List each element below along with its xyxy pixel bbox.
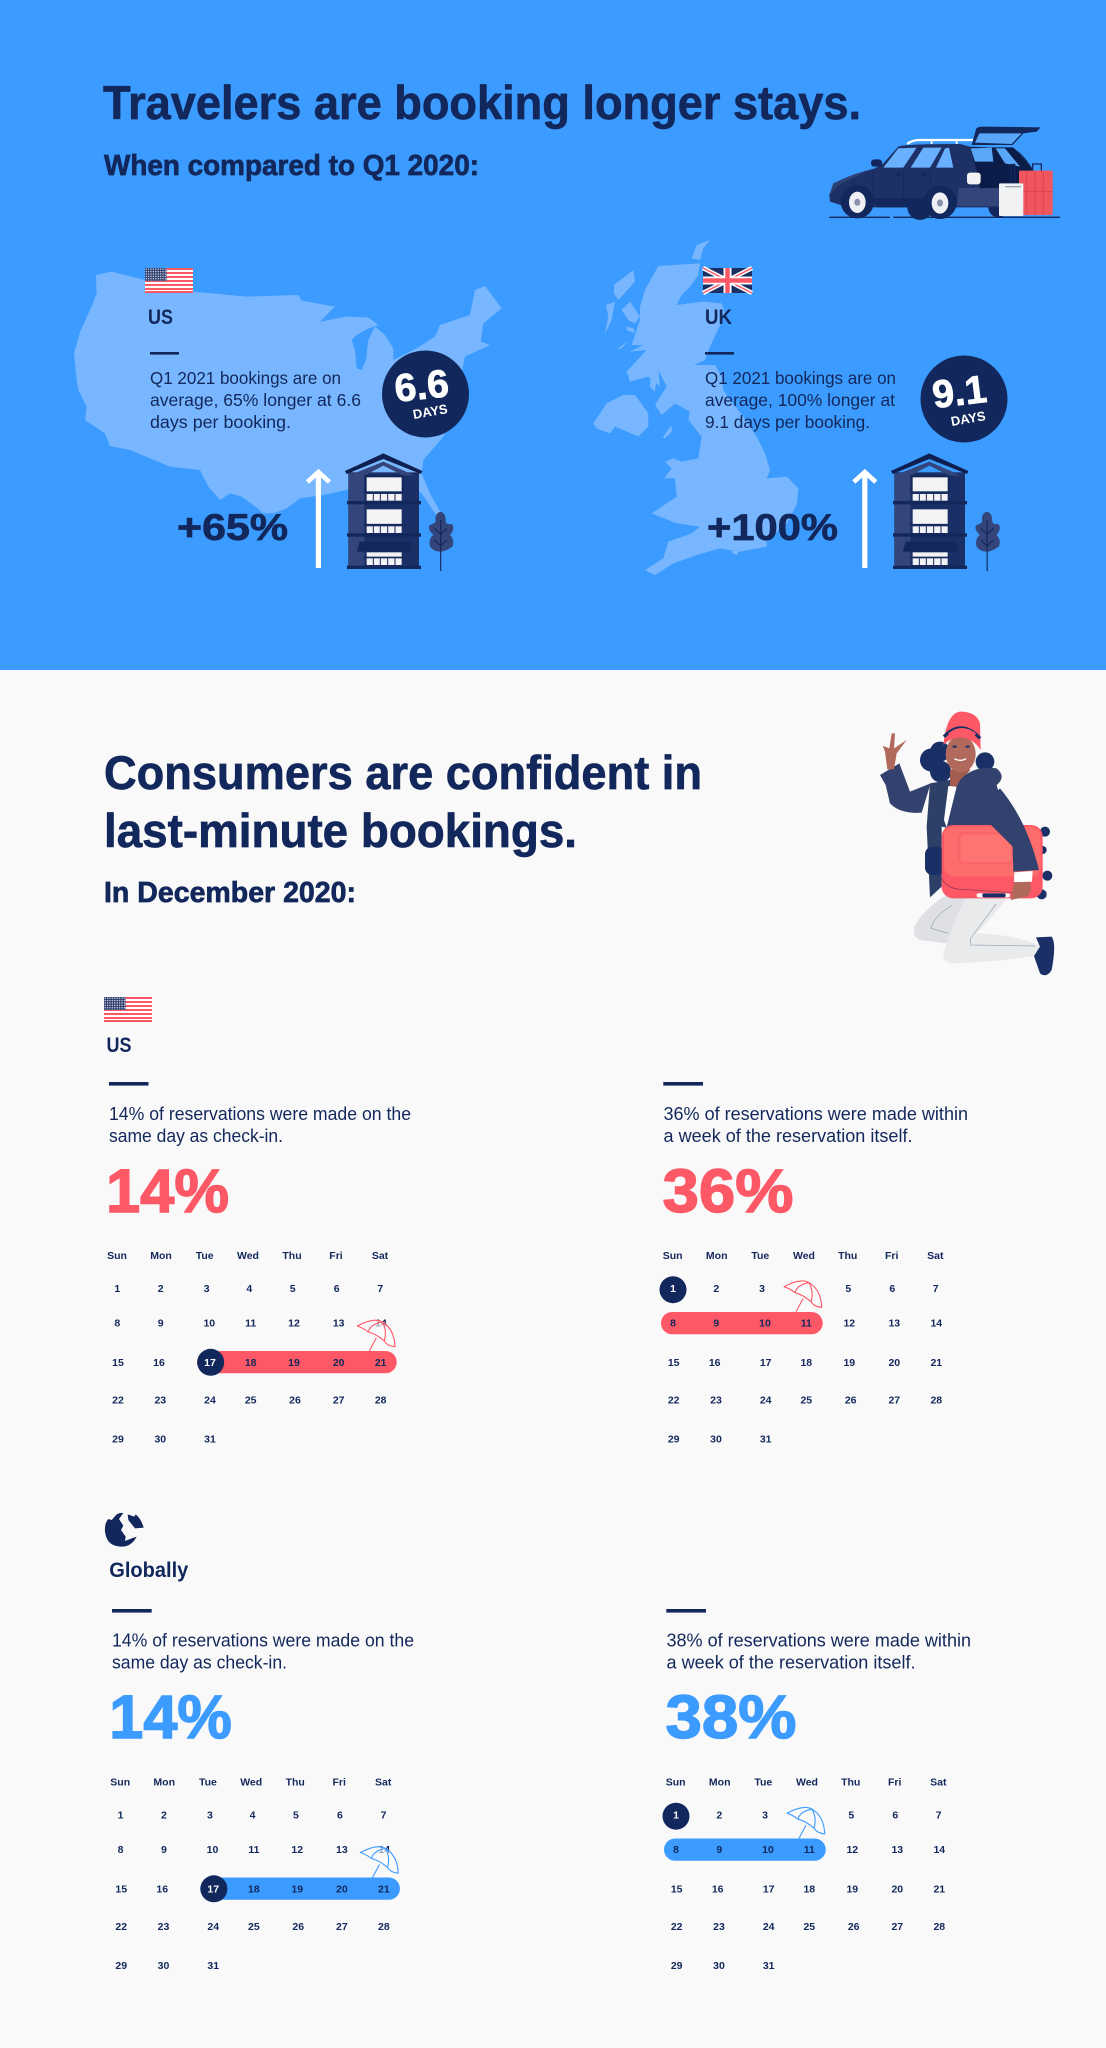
calendar: 30 bbox=[710, 1434, 722, 1446]
calendar: 10 bbox=[203, 1318, 215, 1330]
calendar: 17 bbox=[204, 1357, 216, 1369]
calendar: 8 bbox=[114, 1318, 120, 1330]
calendar: Tue bbox=[199, 1776, 217, 1788]
calendar: 8 bbox=[673, 1844, 679, 1856]
calendar: 11 bbox=[804, 1844, 815, 1856]
calendar: 27 bbox=[333, 1394, 345, 1406]
calendar: 18 bbox=[248, 1884, 260, 1896]
calendar: 31 bbox=[204, 1434, 216, 1446]
icon: tree bbox=[975, 512, 1000, 571]
calendar: 15 bbox=[668, 1357, 680, 1369]
calendar: Mon bbox=[153, 1776, 175, 1788]
calendar: 13 bbox=[891, 1844, 903, 1856]
calendar: 16 bbox=[156, 1884, 168, 1896]
icon: umbrella bbox=[360, 1847, 398, 1878]
calendar: Thu bbox=[286, 1776, 305, 1788]
panel: global within-a-week calendar bbox=[662, 1609, 971, 1972]
calendar: 30 bbox=[713, 1960, 725, 1972]
stat: 14%: 14% bbox=[109, 1683, 232, 1751]
description: same day as check-in. bbox=[109, 1126, 283, 1146]
icon: building bbox=[345, 453, 422, 569]
icon: umbrella bbox=[787, 1807, 825, 1838]
calendar: 1 bbox=[670, 1283, 676, 1295]
calendar: 22 bbox=[671, 1921, 683, 1933]
calendar: 23 bbox=[154, 1394, 166, 1406]
badge: 6.6 days: DAYS bbox=[412, 401, 449, 422]
panel: UK stay bbox=[703, 268, 1008, 571]
badge: 9.1 days: 9.1 bbox=[930, 368, 989, 417]
calendar bbox=[107, 1250, 397, 1446]
calendar bbox=[660, 1250, 944, 1446]
badge: 6.6 days: 6.6 bbox=[392, 362, 451, 411]
description: US: Q1 2021 bookings are on bbox=[150, 368, 341, 388]
calendar: 1 bbox=[114, 1283, 120, 1295]
calendar: 7 bbox=[381, 1810, 387, 1822]
label: US: US bbox=[148, 306, 173, 329]
calendar: 20 bbox=[333, 1357, 345, 1369]
calendar: 22 bbox=[668, 1394, 680, 1406]
calendar: 26 bbox=[292, 1921, 304, 1933]
calendar: 28 bbox=[375, 1394, 387, 1406]
icon: US flag bbox=[104, 997, 152, 1022]
description: same day as check-in. bbox=[112, 1653, 287, 1673]
map: United Kingdom bbox=[593, 240, 798, 575]
calendar: 20 bbox=[891, 1884, 903, 1896]
panel: US same-day calendar bbox=[104, 997, 411, 1446]
calendar: 24 bbox=[760, 1394, 772, 1406]
calendar: 2 bbox=[713, 1283, 719, 1295]
description: 36% of reservations were made within bbox=[664, 1104, 968, 1124]
calendar: 6 bbox=[892, 1810, 898, 1822]
calendar: 18 bbox=[800, 1357, 812, 1369]
calendar: 26 bbox=[848, 1921, 860, 1933]
panel: travelers blue section bbox=[0, 0, 1106, 670]
calendar: 16 bbox=[709, 1357, 721, 1369]
title: Travelers are booking longer stays. bbox=[103, 76, 861, 129]
calendar: 8 bbox=[670, 1318, 676, 1330]
calendar: Fri bbox=[332, 1776, 346, 1788]
illustration: car with suitcases bbox=[829, 127, 1060, 220]
calendar: 25 bbox=[800, 1394, 812, 1406]
calendar bbox=[110, 1776, 400, 1972]
panel: US stay bbox=[145, 268, 469, 571]
calendar: 23 bbox=[710, 1394, 722, 1406]
label: Globally: Globally bbox=[109, 1559, 189, 1582]
stat: 14%: 14% bbox=[106, 1157, 229, 1225]
calendar: Fri bbox=[888, 1776, 901, 1788]
calendar: 23 bbox=[158, 1921, 169, 1933]
calendar: 9 bbox=[716, 1844, 722, 1856]
calendar: 17 bbox=[207, 1884, 219, 1896]
calendar: Sat bbox=[372, 1250, 389, 1262]
icon: building bbox=[891, 453, 968, 569]
description: 38% of reservations were made within bbox=[666, 1631, 971, 1651]
calendar: 31 bbox=[763, 1960, 775, 1972]
calendar: 21 bbox=[933, 1884, 945, 1896]
calendar: 13 bbox=[333, 1318, 345, 1330]
calendar: Thu bbox=[841, 1776, 860, 1788]
calendar: 22 bbox=[112, 1394, 124, 1406]
calendar: 18 bbox=[245, 1357, 257, 1369]
calendar: 11 bbox=[245, 1318, 256, 1330]
calendar: Mon bbox=[709, 1776, 730, 1788]
icon: UK flag bbox=[703, 268, 752, 293]
badge: 9.1 days bbox=[920, 356, 1008, 442]
calendar: 6 bbox=[334, 1283, 340, 1295]
calendar: 7 bbox=[377, 1283, 383, 1295]
calendar: 27 bbox=[891, 1921, 903, 1933]
calendar: 26 bbox=[845, 1394, 857, 1406]
calendar: Fri bbox=[885, 1250, 898, 1262]
description: 14% of reservations were made on the bbox=[112, 1631, 414, 1651]
calendar: 19 bbox=[846, 1884, 858, 1896]
calendar: Tue bbox=[754, 1776, 772, 1788]
calendar: 20 bbox=[888, 1357, 900, 1369]
calendar bbox=[662, 1776, 947, 1972]
description: US bbox=[150, 352, 361, 432]
heading bbox=[104, 746, 702, 857]
stat: +65%: +65% bbox=[177, 507, 288, 548]
calendar: 20 bbox=[336, 1884, 348, 1896]
calendar: 14 bbox=[930, 1318, 942, 1330]
subheading: In December 2020: bbox=[104, 877, 356, 909]
description: UK: average, 100% longer at bbox=[705, 390, 895, 410]
description: a week of the reservation itself. bbox=[664, 1126, 912, 1146]
calendar: 14 bbox=[933, 1844, 945, 1856]
calendar: 21 bbox=[375, 1357, 387, 1369]
calendar: 17 bbox=[763, 1884, 775, 1896]
calendar: 22 bbox=[115, 1921, 127, 1933]
calendar: 25 bbox=[803, 1921, 815, 1933]
heading: Consumers are confident in bbox=[104, 746, 702, 799]
calendar: 21 bbox=[378, 1884, 390, 1896]
calendar: 7 bbox=[936, 1810, 942, 1822]
icon: umbrella bbox=[357, 1320, 395, 1351]
calendar: Mon bbox=[150, 1250, 172, 1262]
calendar: 31 bbox=[207, 1960, 219, 1972]
description: US: average, 65% longer at 6.6 bbox=[150, 390, 361, 410]
calendar: 29 bbox=[671, 1960, 683, 1972]
calendar: Wed bbox=[237, 1250, 259, 1262]
description: a week of the reservation itself. bbox=[666, 1653, 916, 1673]
calendar: 9 bbox=[713, 1318, 719, 1330]
calendar: 4 bbox=[246, 1283, 252, 1295]
description bbox=[112, 1609, 414, 1673]
calendar: 24 bbox=[763, 1921, 775, 1933]
icon: tree bbox=[429, 512, 453, 571]
calendar: 29 bbox=[115, 1960, 127, 1972]
calendar: 11 bbox=[801, 1318, 812, 1330]
calendar: 19 bbox=[843, 1357, 855, 1369]
calendar: 29 bbox=[668, 1434, 680, 1446]
calendar: 6 bbox=[889, 1283, 895, 1295]
description: UK bbox=[705, 352, 896, 432]
description: US: days per booking. bbox=[150, 412, 291, 432]
calendar: 29 bbox=[112, 1434, 124, 1446]
calendar: 13 bbox=[336, 1844, 348, 1856]
stat: 36%: 36% bbox=[662, 1157, 794, 1225]
calendar: 15 bbox=[115, 1884, 127, 1896]
icon: umbrella bbox=[784, 1281, 822, 1312]
description bbox=[666, 1609, 971, 1673]
calendar: 28 bbox=[378, 1921, 390, 1933]
panel: last-minute section bbox=[0, 670, 1106, 2048]
calendar: 24 bbox=[207, 1921, 219, 1933]
calendar: Tue bbox=[751, 1250, 769, 1262]
calendar: 10 bbox=[762, 1844, 774, 1856]
description bbox=[109, 1082, 411, 1146]
calendar: 14 bbox=[378, 1844, 390, 1856]
calendar: 9 bbox=[158, 1318, 164, 1330]
badge: 9.1 days: DAYS bbox=[950, 408, 987, 429]
badge: 6.6 days bbox=[382, 350, 469, 438]
calendar: Sat bbox=[927, 1250, 944, 1262]
calendar: 3 bbox=[762, 1810, 768, 1822]
calendar: 15 bbox=[112, 1357, 124, 1369]
calendar: 3 bbox=[207, 1810, 213, 1822]
arrow: up bbox=[854, 472, 876, 568]
calendar: 12 bbox=[288, 1318, 300, 1330]
calendar: 7 bbox=[933, 1283, 939, 1295]
calendar: Mon bbox=[706, 1250, 727, 1262]
calendar: Sat bbox=[375, 1776, 392, 1788]
calendar: 3 bbox=[759, 1283, 765, 1295]
calendar: 8 bbox=[118, 1844, 124, 1856]
calendar: Wed bbox=[793, 1250, 815, 1262]
panel: US within-a-week calendar bbox=[660, 1082, 968, 1446]
calendar: 19 bbox=[291, 1884, 303, 1896]
description bbox=[663, 1082, 968, 1146]
calendar: 2 bbox=[716, 1810, 722, 1822]
calendar: 28 bbox=[930, 1394, 942, 1406]
calendar: 17 bbox=[760, 1357, 772, 1369]
calendar: 31 bbox=[760, 1434, 772, 1446]
calendar: 11 bbox=[248, 1844, 260, 1856]
stat: +100%: +100% bbox=[707, 507, 838, 548]
calendar: Wed bbox=[796, 1776, 818, 1788]
description: 14% of reservations were made on the bbox=[109, 1104, 411, 1124]
calendar: Sun bbox=[666, 1776, 686, 1788]
arrow: up bbox=[307, 472, 329, 568]
calendar: 1 bbox=[118, 1810, 124, 1822]
calendar: 2 bbox=[158, 1283, 164, 1295]
calendar: 16 bbox=[153, 1357, 165, 1369]
calendar: 21 bbox=[930, 1357, 942, 1369]
calendar: 27 bbox=[336, 1921, 348, 1933]
calendar: 27 bbox=[888, 1394, 900, 1406]
calendar: 25 bbox=[245, 1394, 257, 1406]
icon: US flag bbox=[145, 268, 193, 293]
calendar: Tue bbox=[196, 1250, 214, 1262]
label: UK: UK bbox=[705, 306, 732, 329]
calendar: 2 bbox=[161, 1810, 167, 1822]
subtitle: When compared to Q1 2020: bbox=[104, 150, 479, 182]
calendar: 5 bbox=[848, 1810, 854, 1822]
calendar: 5 bbox=[293, 1810, 299, 1822]
calendar: 26 bbox=[289, 1394, 301, 1406]
calendar: 14 bbox=[375, 1318, 387, 1330]
icon: globe bbox=[105, 1513, 144, 1547]
calendar: Wed bbox=[240, 1776, 262, 1788]
calendar: Sun bbox=[663, 1250, 683, 1262]
calendar: Sat bbox=[930, 1776, 947, 1788]
calendar: 16 bbox=[712, 1884, 724, 1896]
description: UK: 9.1 days per booking. bbox=[705, 412, 870, 432]
calendar: 10 bbox=[759, 1318, 771, 1330]
calendar: 1 bbox=[673, 1810, 679, 1822]
calendar: 15 bbox=[671, 1884, 683, 1896]
description: UK: Q1 2021 bookings are on bbox=[705, 368, 896, 388]
calendar: 5 bbox=[290, 1283, 296, 1295]
calendar: 30 bbox=[154, 1434, 166, 1446]
calendar: 18 bbox=[803, 1884, 815, 1896]
calendar: 30 bbox=[158, 1960, 169, 1972]
calendar: 25 bbox=[248, 1921, 260, 1933]
stat: 38%: 38% bbox=[666, 1683, 796, 1751]
calendar: Thu bbox=[838, 1250, 857, 1262]
calendar: Thu bbox=[282, 1250, 302, 1262]
calendar: 19 bbox=[288, 1357, 300, 1369]
calendar: 10 bbox=[207, 1844, 218, 1856]
calendar: 4 bbox=[250, 1810, 256, 1822]
calendar: 12 bbox=[843, 1318, 855, 1330]
calendar: Sun bbox=[110, 1776, 130, 1788]
map: United States bbox=[74, 272, 502, 522]
calendar: 5 bbox=[845, 1283, 851, 1295]
calendar: 28 bbox=[933, 1921, 945, 1933]
label: US: US bbox=[106, 1034, 132, 1057]
calendar: 12 bbox=[291, 1844, 303, 1856]
calendar: 6 bbox=[337, 1810, 343, 1822]
panel: global same-day calendar bbox=[105, 1513, 414, 1972]
calendar: 12 bbox=[846, 1844, 858, 1856]
illustration: traveler with suitcase bbox=[880, 712, 1054, 975]
heading: last-minute bookings. bbox=[104, 804, 577, 857]
calendar: 24 bbox=[204, 1394, 216, 1406]
calendar: 9 bbox=[161, 1844, 167, 1856]
calendar: 3 bbox=[204, 1283, 210, 1295]
calendar: Sun bbox=[107, 1250, 127, 1262]
calendar: 13 bbox=[888, 1318, 900, 1330]
calendar: 23 bbox=[713, 1921, 725, 1933]
calendar: Fri bbox=[329, 1250, 343, 1262]
